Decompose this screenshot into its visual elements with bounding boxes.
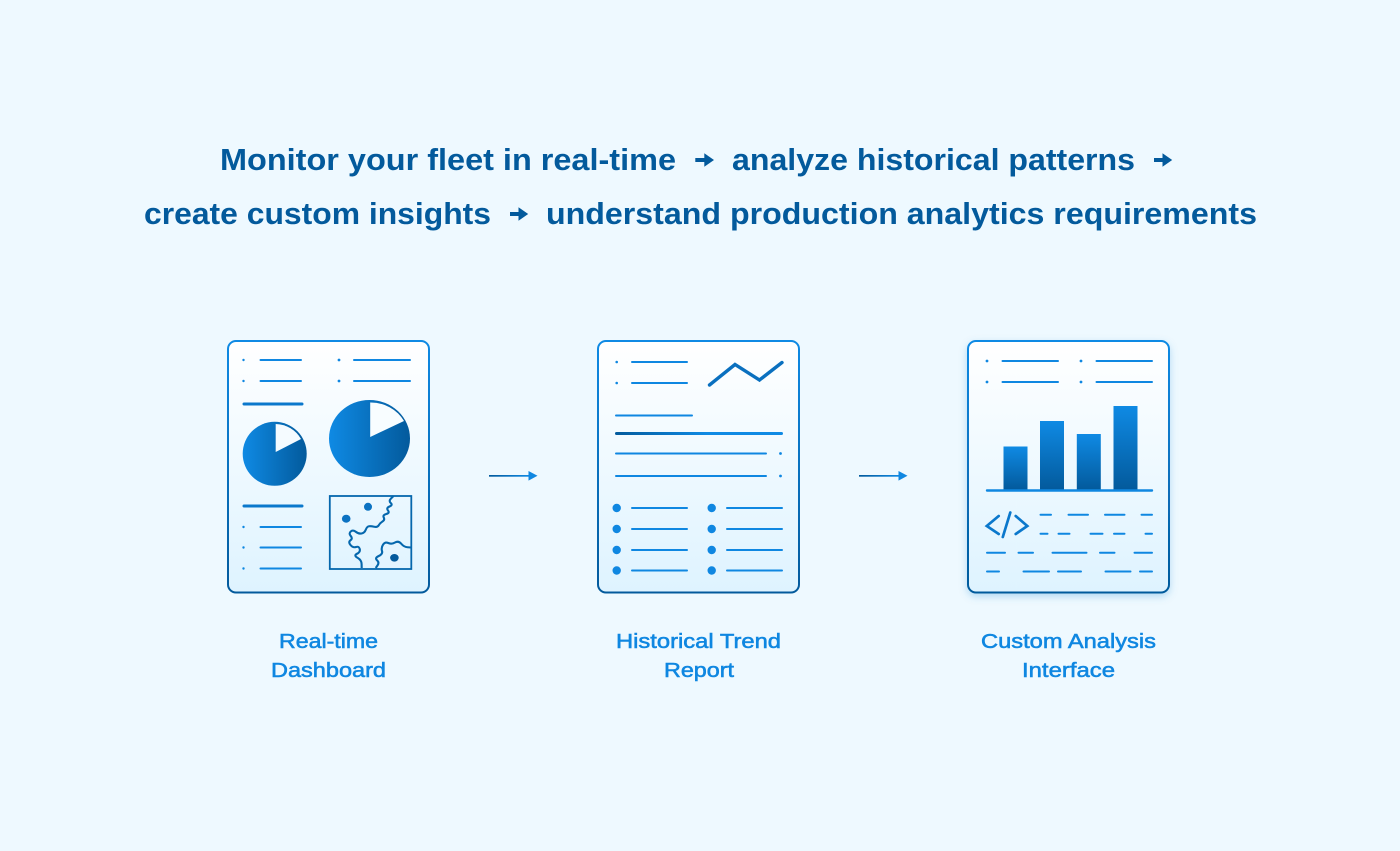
bar chart (987, 406, 1152, 490)
line chart (710, 362, 782, 385)
label: real-time dashboard (271, 630, 386, 682)
top list lines (986, 360, 1152, 383)
code lines (987, 515, 1152, 572)
label: historical trend report (616, 630, 781, 682)
top list lines (242, 359, 410, 570)
label: custom analysis interface: Custom Analysis (981, 630, 1156, 653)
arrow: title line one, second (1154, 153, 1172, 167)
icon: code brackets (987, 512, 1027, 537)
title: create custom insights (144, 196, 491, 231)
title: analyze historical patterns (732, 142, 1135, 177)
label: custom analysis interface (981, 630, 1156, 682)
panel: custom analysis interface (968, 341, 1169, 592)
arrow: title line two (510, 207, 528, 221)
label: custom analysis interface: Interface (1022, 659, 1115, 682)
label: historical trend report: Report (664, 659, 734, 682)
label: real-time dashboard: Real-time (279, 630, 378, 653)
large pie chart (329, 400, 410, 477)
arrow: dashboard to report (489, 471, 538, 481)
label: real-time dashboard: Dashboard (271, 659, 386, 682)
map (330, 496, 411, 569)
small pie chart (243, 422, 307, 486)
text rules (615, 416, 783, 477)
top list lines (615, 361, 687, 384)
panel: historical trend report (598, 341, 799, 592)
panel: real-time dashboard (228, 341, 429, 592)
bullet list (612, 504, 782, 575)
label: historical trend report: Historical Trend (616, 630, 781, 653)
title: understand production analytics requirements (546, 196, 1257, 231)
section rules (244, 404, 302, 506)
arrow: title line one, first (695, 153, 714, 167)
title: Monitor your fleet in real-time (220, 142, 676, 177)
title (144, 142, 1257, 231)
arrow: report to interface (859, 471, 908, 481)
